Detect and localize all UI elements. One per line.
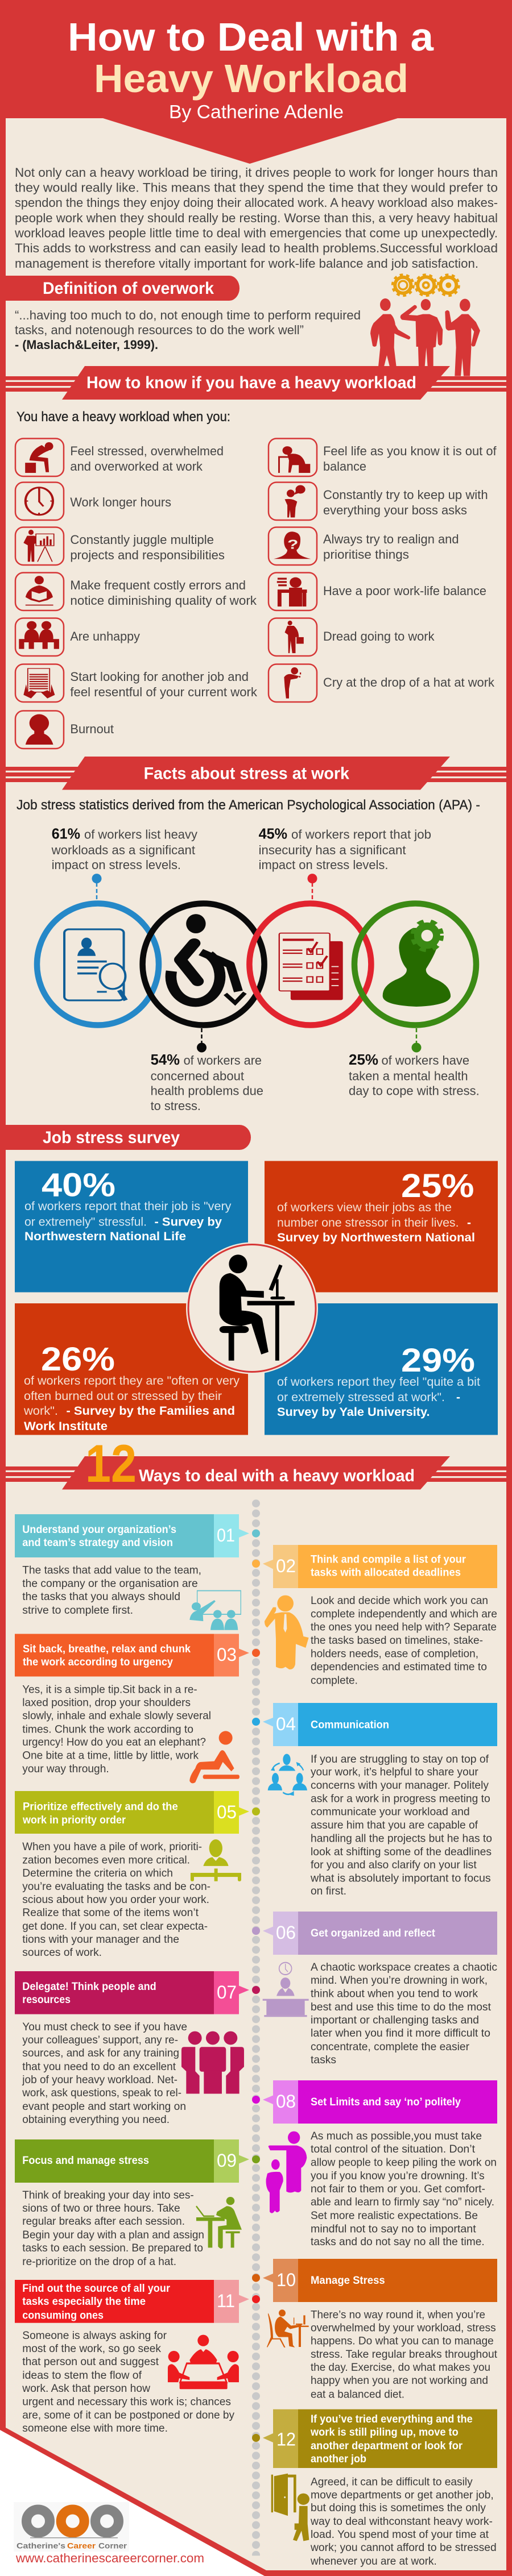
step 09: Focus and manage stress (22, 2154, 149, 2167)
step 08 body: allow people to keep piling the work on (311, 2157, 497, 2169)
step 08: Set Limits and say ‘no’ politely (311, 2096, 461, 2108)
step 04 body (310, 1753, 492, 1897)
survey panel: 29 percent (265, 1303, 498, 1435)
symptoms left column text: Feel stressed, overwhelmed (70, 444, 224, 458)
step 01: 01 (217, 1525, 235, 1545)
step 02 body: dependencies and estimated time to (311, 1661, 487, 1673)
stat: 45 percent: 45% (259, 825, 287, 842)
icon: team of three (181, 2031, 244, 2094)
stat: 61 percent: impact on stress levels. (52, 858, 181, 872)
step 03 body (22, 1684, 211, 1775)
logo: Catherine's Career Corner: Corner (98, 2541, 127, 2550)
icon: checklist (279, 933, 343, 1000)
survey panel: 26 percent: often burned out or stressed by their (24, 1390, 222, 1403)
step 05 body: you’re evaluating the tasks and be con- (22, 1880, 210, 1893)
survey panel: 29 percent: 29% (401, 1342, 475, 1379)
step 07 body: obtaining everything you need. (22, 2113, 170, 2126)
icon: person with clock at desk (263, 1963, 309, 2017)
symptoms left column text: projects and responsibilities (70, 548, 225, 562)
step 03: the work according to urgency (23, 1656, 173, 1668)
step 10 body: stress. Take regular breaks throughout (311, 2348, 498, 2361)
title line 1: How to Deal with a (68, 15, 434, 59)
survey panel: 25 percent: of workers view their jobs as the (277, 1201, 452, 1214)
connector: blue dot (92, 874, 101, 900)
definition quote: - (Maslach&Leiter, 1999). (15, 338, 158, 352)
icon: communication cycle (268, 1754, 307, 1796)
step 11 body: work. Ask that person how (22, 2382, 151, 2395)
step 06 body: best and use this time to do the most (311, 2001, 492, 2013)
step 10 body: happens. Do what you can to manage (311, 2335, 494, 2348)
step 12 body (310, 2476, 497, 2567)
stat: 54 percent: health problems due (151, 1083, 263, 1098)
step 08 body: able and learn to firmly say “no” nicely. (311, 2196, 494, 2208)
step 11 (15, 2280, 260, 2434)
definition quote (15, 308, 361, 352)
survey panel: 25 percent: Survey by Northwestern National (277, 1231, 475, 1244)
survey panel: 29 percent: Survey by Yale University. (277, 1406, 430, 1419)
stat: 45 percent: of workers report that job (291, 828, 431, 841)
step 04 body: look at shifting some of the deadlines (311, 1846, 492, 1858)
step 12: 12 (276, 2429, 296, 2449)
step 06: 06 (276, 1922, 296, 1943)
intro paragraph (14, 165, 498, 271)
heading ribbon: 12 ways: 12 (85, 1434, 137, 1493)
step 04: 04 (276, 1714, 296, 1734)
definition quote: tasks, and notenough resources to do the work well” (15, 323, 304, 337)
survey panel: 40 percent: or extremely" stressful. (24, 1215, 147, 1228)
icon: person at laptop desk (196, 2197, 242, 2249)
step 04 body: concerns with your manager. Politely (311, 1779, 489, 1792)
stat: 54 percent: 54% (151, 1051, 180, 1068)
icon: two people on bench (19, 621, 59, 649)
survey panel: 26 percent: 26% (41, 1341, 115, 1378)
step 07 body: evant people and start working on (22, 2100, 186, 2113)
heading ribbon: facts about stress: Facts about stress at work (144, 765, 349, 783)
symptoms right column text: Dread going to work (323, 629, 435, 643)
step 06 body: important or challenging tasks and (311, 2014, 479, 2026)
step 07 body: that you need to do an excellent (22, 2060, 176, 2073)
step 03 body: slowly, inhale and exhale slowly several (22, 1710, 211, 1722)
step 04 body: If you are struggling to stay on top of (311, 1753, 489, 1765)
symptoms left column text (70, 444, 258, 736)
subheading: you have a heavy workload when: You have a heavy workload when you: (16, 409, 230, 425)
step 05 body: sources of work. (22, 1946, 102, 1959)
icon: stressed person (25, 442, 53, 473)
step 04 body: on first. (311, 1885, 346, 1897)
stat: 61 percent (51, 825, 197, 872)
step 11: Find out the source of all your (22, 2282, 170, 2295)
step 04 body: handling all the projects but he has to (311, 1833, 492, 1845)
survey panel: 25 percent (265, 1161, 498, 1293)
icon: head with question mark: ? (287, 537, 298, 551)
symptoms left column text: Work longer hours (70, 495, 171, 509)
intro paragraph: they would really like. This means that they spend the time that they would prefer to (15, 181, 498, 195)
step 05 body: Realize that some of the items won’t (22, 1906, 199, 1919)
step 07 body: You must check to see if you have (22, 2021, 187, 2033)
symptoms left column text: notice diminishing quality of work (70, 593, 257, 608)
title line 2: Heavy Workload (94, 56, 408, 101)
step 12 body: but doing this is sometimes the only (311, 2502, 486, 2514)
step 06 (252, 1912, 497, 2066)
step 04 body: what is absolutely important to focus (310, 1872, 491, 1885)
step 02 body: the tasks based on timelines, stake- (311, 1634, 483, 1647)
icon: person dining at table (267, 2309, 309, 2348)
step 09 body: Begin your day with a plan and assign (22, 2229, 204, 2241)
intro paragraph: This adds to workstress and can easily lead to health problems.Successful workload (15, 241, 498, 255)
stat: 25 percent: day to cope with stress. (349, 1083, 480, 1098)
step 02 body: complete. (311, 1674, 358, 1686)
interlocking rings (37, 904, 476, 1025)
icon: head with gear (383, 921, 451, 1007)
step 07: 07 (217, 1982, 237, 2002)
step 01 body (22, 1564, 201, 1617)
survey panel: 25 percent: - (467, 1216, 471, 1229)
heading ribbon: 12 ways (6, 1434, 506, 1493)
step 01 body: The tasks that add value to the team, (22, 1564, 201, 1577)
icon: newspaper (23, 668, 55, 699)
step 03: 03 (217, 1644, 237, 1665)
step 05 body: get done. If you can, set clear expecta- (22, 1920, 208, 1933)
survey panel: 26 percent (15, 1303, 248, 1435)
step 04: Communication (311, 1719, 389, 1731)
step 11: tasks especially the time (22, 2295, 146, 2308)
definition quote: “...having too much to do, not enough time to perform required (15, 308, 361, 322)
step 03 body: Yes, it is a simple tip.Sit back in a re- (22, 1684, 197, 1696)
symptoms right column text (323, 444, 497, 689)
icon: head with question mark (274, 531, 311, 559)
connector: black dot (197, 1028, 207, 1053)
stat: 25 percent: taken a mental health (349, 1069, 468, 1083)
icon: three business people (370, 298, 480, 376)
step 07 body: sources, and ask for any training (22, 2047, 179, 2059)
symptoms right column text: Always try to realign and (323, 532, 459, 546)
heading ribbon: facts about stress (6, 757, 506, 790)
timeline dots (252, 1498, 260, 2556)
symptoms left column text: feel resentful of your current work (70, 685, 258, 699)
logo: Catherine's Career Corner: Catherine's (16, 2541, 65, 2550)
step 08 body: you if you know you’re drowning. It’s (311, 2170, 485, 2182)
symptoms left column text: Constantly juggle multiple (70, 533, 214, 547)
heading: job stress survey: Job stress survey (43, 1128, 180, 1147)
survey panel: 29 percent: - (456, 1391, 460, 1404)
step 02 body: Look and decide which work you can (311, 1594, 488, 1607)
symptoms left column text: and overworked at work (70, 459, 203, 473)
intro paragraph: workload leaves people little time to deal with emergencies that come up unexpectedly. (14, 226, 498, 240)
icon: presenter with chart (23, 530, 54, 562)
step 11 body: that person out and suggest (22, 2355, 159, 2368)
step 09 body: regular breaks after each session. (22, 2215, 185, 2228)
step 03 body: urgency! How do you eat an elephant? (22, 1736, 206, 1748)
step 01 body: the company or the organisation are (22, 1577, 198, 1590)
intro paragraph: spendon the things they enjoy doing their allocated work. A heavy workload also makes- (15, 196, 498, 210)
step 01 body: strive to complete first. (22, 1604, 133, 1617)
icon: reclining person (189, 1731, 240, 1783)
step 06 body: concentrate, complete the easier (311, 2041, 469, 2053)
stat: 54 percent (151, 1051, 263, 1113)
step 07 body (22, 2021, 187, 2126)
step 05 body: tions with your manager and the (22, 1933, 179, 1946)
connector: red dot (307, 874, 317, 900)
icon: person at desk with books (277, 577, 307, 606)
symptom icons (19, 442, 311, 745)
icon: document and magnifier (64, 929, 126, 1000)
step 04 body: communicate your workload and (311, 1806, 470, 1818)
survey panel: 29 percent: or extremely stressed at work". (277, 1391, 445, 1404)
step 02 (252, 1545, 497, 1686)
step 08 body: As much as possible,you must take (311, 2130, 482, 2142)
survey panel: 26 percent: of workers report they are "often or very (24, 1374, 240, 1387)
ring icons (64, 914, 451, 1007)
step 12: If you’ve tried everything and the (311, 2413, 473, 2425)
step 04 body: your work, it’s helpful to share your (311, 1766, 478, 1779)
step 02 body: complete independently and which are (311, 1607, 497, 1620)
step 05 body (22, 1840, 210, 1959)
survey panel: 26 percent: Work Institute (24, 1420, 108, 1433)
stat: 25 percent: 25% (349, 1051, 378, 1068)
step 05 body: zation becomes even more critical. (22, 1854, 190, 1867)
step 11 body: most of the work, so go seek (22, 2342, 161, 2355)
icon: wheelchair (171, 914, 245, 1003)
step 09: 09 (217, 2150, 237, 2171)
step 03 body: your way through. (22, 1763, 109, 1775)
step 08 body: Set more realistic expectations. Be (311, 2209, 478, 2222)
step 06 body: A chaotic workspace creates a chaotic (311, 1961, 497, 1973)
step 01 body: the tasks that you always should (22, 1590, 180, 1603)
step 07 body: work, ask questions, speak to rel- (22, 2087, 181, 2099)
step 10: Manage Stress (311, 2274, 385, 2287)
symptoms right column text: prioritise things (323, 547, 409, 562)
icon: clock (25, 487, 53, 516)
step 07 body: your colleagues’ support, any re- (22, 2034, 178, 2046)
step 08 body: mindful not to say no to important (311, 2222, 476, 2235)
step 04 body: ask for a work in progress meeting to (311, 1792, 490, 1805)
connector: green dot (412, 1028, 421, 1053)
intro paragraph: management is therefore vitally important for work-life balance and job satisfaction. (15, 256, 478, 271)
survey panel: 26 percent: - Survey by the Families and (66, 1405, 235, 1418)
survey panel: 40 percent: - Survey by (155, 1215, 222, 1228)
survey panel: 29 percent: of workers report they feel "quite a bit (277, 1376, 480, 1389)
stat: 54 percent: to stress. (151, 1099, 201, 1113)
step 03 (15, 1634, 260, 1775)
symptoms left column text: Are unhappy (70, 629, 140, 643)
step 10 (252, 2259, 498, 2401)
step 01: and team’s strategy and vision (22, 1536, 173, 1549)
step 10 body: eat a balanced diet. (311, 2388, 404, 2401)
stat: 54 percent: of workers are (184, 1053, 262, 1067)
symptoms left column text: Start looking for another job and (70, 670, 249, 684)
step 03: Sit back, breathe, relax and chunk (23, 1643, 191, 1655)
step 10 body: overwhelmed by your workload, stress (311, 2322, 496, 2334)
step 08 body (311, 2130, 497, 2248)
step 10 body: happy when you are not working and (311, 2374, 488, 2387)
icon: walking with briefcase (285, 621, 304, 653)
step 10: 10 (276, 2270, 296, 2290)
intro paragraph: Not only can a heavy workload be tiring, it drives people to work for longer hours than (15, 165, 498, 180)
symptoms right column text: Cry at the drop of a hat at work (323, 675, 495, 689)
step 06: Get organized and reflect (311, 1927, 435, 1939)
step 04 (252, 1703, 497, 1897)
step 08 body: tasks and do not say no all the time. (311, 2236, 485, 2248)
step 04 body: for you and also clarify on your list (311, 1859, 477, 1871)
step 04 body: assure him that you are capable of (311, 1819, 478, 1831)
icon: crying person (284, 667, 301, 699)
step 11 body (22, 2329, 234, 2434)
survey panel: 40 percent (15, 1161, 248, 1293)
heading: definition of overwork: Definition of overwork (43, 279, 214, 298)
icon: teaching at whiteboard (189, 1591, 241, 1630)
icon: person reading (26, 576, 53, 605)
survey panel: 40 percent: of workers report that their job is "very (24, 1200, 232, 1213)
step 12 body: Agreed, it can be difficult to easily (311, 2476, 473, 2488)
step 02 body: holders needs, ease of completion, (311, 1647, 478, 1660)
step 06 body: think about when you tend to work (311, 1987, 478, 2000)
step 12 body: move departments or get another job, (311, 2489, 494, 2502)
step 11 body: Someone is always asking for (22, 2329, 167, 2342)
icon: meeting table (168, 2335, 239, 2389)
symptoms right column text: balance (323, 459, 366, 473)
stat: 61 percent: of workers list heavy (84, 828, 197, 841)
symptoms left column text: Burnout (70, 722, 114, 736)
step 07 body: job of your heavy workload. Net- (22, 2074, 177, 2086)
icon: sleeping at desk (278, 446, 310, 473)
logo: Catherine's Career Corner (14, 2502, 129, 2552)
step 08: 08 (276, 2091, 296, 2112)
step 09 body (22, 2189, 204, 2268)
step 03 body: One bite at a time, little by little, work (22, 1750, 199, 1762)
survey panel: 25 percent: number one stressor in their lives. (277, 1216, 459, 1229)
step 10 body (311, 2309, 498, 2401)
survey panel: 25 percent: 25% (401, 1167, 474, 1204)
stat: 45 percent: insecurity has a significant (259, 843, 406, 857)
heading ribbon: how to know (6, 366, 506, 400)
step 01: Understand your organization’s (22, 1523, 176, 1536)
step 01 (15, 1514, 260, 1617)
icon: businessman with folder (265, 1596, 309, 1669)
step 11 body: urgent and necessary this work is; chances (22, 2395, 231, 2408)
heading ribbon: 12 ways: Ways to deal with a heavy workload (139, 1466, 415, 1485)
stat: 25 percent (349, 1051, 480, 1098)
step 07: resources (22, 1993, 71, 2006)
step 12 body: work; you cannot afford to be stressed (310, 2541, 497, 2554)
step 05 body: Determine the criteria on which (22, 1867, 173, 1880)
survey panel: 26 percent: work". (23, 1405, 58, 1418)
stat: 45 percent (259, 825, 431, 872)
icon: adult pointing and child (266, 2132, 307, 2213)
step 12: work is still piling up, move to (310, 2426, 459, 2438)
icon: burnout head (26, 714, 53, 745)
center circle: person at computer (186, 1243, 318, 1374)
logo: Catherine's Career Corner: Career (67, 2541, 96, 2550)
step 11 body: someone else with more time. (22, 2422, 168, 2434)
heading ribbon: how to know: How to know if you have a heavy workload (86, 373, 416, 392)
step 11 body: ideas to stem the flow of (22, 2369, 142, 2382)
step 11: 11 (217, 2291, 235, 2311)
symptoms right column text: Constantly try to keep up with (323, 488, 488, 502)
icon: manager at desk (191, 1839, 241, 1881)
step 05 body: scious about how you order your work. (22, 1893, 209, 1906)
step 07 (15, 1971, 260, 2126)
step 12: another job (311, 2453, 366, 2465)
step 02: Think and compile a list of your (311, 1553, 466, 1565)
byline: By Catherine Adenle (169, 101, 344, 122)
step 08 (252, 2080, 497, 2248)
stat: 61 percent: workloads as a significant (51, 843, 195, 857)
step 09 body: re-prioritize on the drop of a hat. (22, 2255, 176, 2268)
step 10 body: There’s no way round it, when you’re (311, 2309, 485, 2321)
symptoms right column text: everything your boss asks (323, 503, 467, 517)
website url: www.catherinescareercorner.com (15, 2551, 204, 2565)
icon: door and leaving person (271, 2474, 309, 2541)
stat: 54 percent: concerned about (151, 1069, 244, 1083)
step 09 body: sions of two or three hours. Take (22, 2202, 180, 2214)
subheading: APA statistics: Job stress statistics derived from the American Psychological Association (APA) - (16, 797, 480, 813)
step 02 body: the ones you need help with? Separate (311, 1621, 497, 1634)
step 12 body: load. You spend most of your time at (311, 2528, 489, 2541)
symptoms right column text: Have a poor work-life balance (323, 584, 486, 598)
step 08 body: total control of the situation. Don’t (311, 2143, 476, 2155)
step 03 body: times. Chunk the work according to (22, 1723, 193, 1736)
heading: definition of overwork (6, 276, 240, 301)
step 02: tasks with allocated deadlines (311, 1567, 461, 1579)
step 10 body: the day. Exercise, do what makes you (311, 2361, 490, 2374)
step 12 (252, 2409, 497, 2567)
step 11 body: are, some of it can be postponed or done by (22, 2409, 234, 2421)
step 06 body: mind. When you’re drowning in work, (311, 1974, 488, 1987)
step 05 (15, 1791, 260, 1959)
step 12 body: way to deal withconstant heavy work- (310, 2515, 493, 2528)
step 12: another department or look for (311, 2440, 463, 2452)
icon: gears (393, 275, 459, 296)
step 05: 05 (217, 1802, 237, 1822)
symptoms left column text: Make frequent costly errors and (70, 578, 246, 592)
step 07: Delegate! Think people and (22, 1980, 156, 1993)
step 05: Prioritize effectively and do the (23, 1801, 178, 1813)
survey panel: 40 percent: 40% (42, 1166, 115, 1203)
step 08 body: not fair to them or you. Get comfort- (311, 2183, 485, 2195)
intro paragraph: people work when they should really be resting. Worse than this, a very heavy habitual (15, 211, 498, 225)
step 03 body: laxed position, drop your shoulders (22, 1697, 191, 1709)
step 09 body: tasks to each session. Be prepared to (22, 2242, 203, 2254)
heading: job stress survey (6, 1125, 251, 1150)
icon: person with speech bubble (285, 485, 305, 517)
step 05: work in priority order (22, 1814, 126, 1826)
symptom boxes outlines (15, 439, 317, 749)
stat: 45 percent: impact on stress levels. (259, 858, 388, 872)
step 05 body: When you have a pile of work, prioriti- (22, 1840, 202, 1853)
step 06 body: tasks (311, 2054, 336, 2066)
step 02 body (311, 1594, 497, 1686)
step 02: 02 (276, 1556, 296, 1576)
step 06 body: later when you find it more difficult to (311, 2027, 490, 2039)
step 09 (15, 2139, 260, 2268)
symptoms right column text: Feel life as you know it is out of (323, 444, 497, 458)
step 09 body: Think of breaking your day into ses- (22, 2189, 194, 2201)
stat: 25 percent: of workers have (381, 1053, 469, 1067)
stat: 61 percent: 61% (52, 825, 80, 842)
step 12 body: whenever you are at work. (310, 2555, 437, 2567)
step 06 body (311, 1961, 497, 2066)
step 11: consuming ones (22, 2309, 104, 2321)
survey panel: 40 percent: Northwestern National Life (24, 1230, 186, 1243)
header banner (0, 0, 512, 164)
